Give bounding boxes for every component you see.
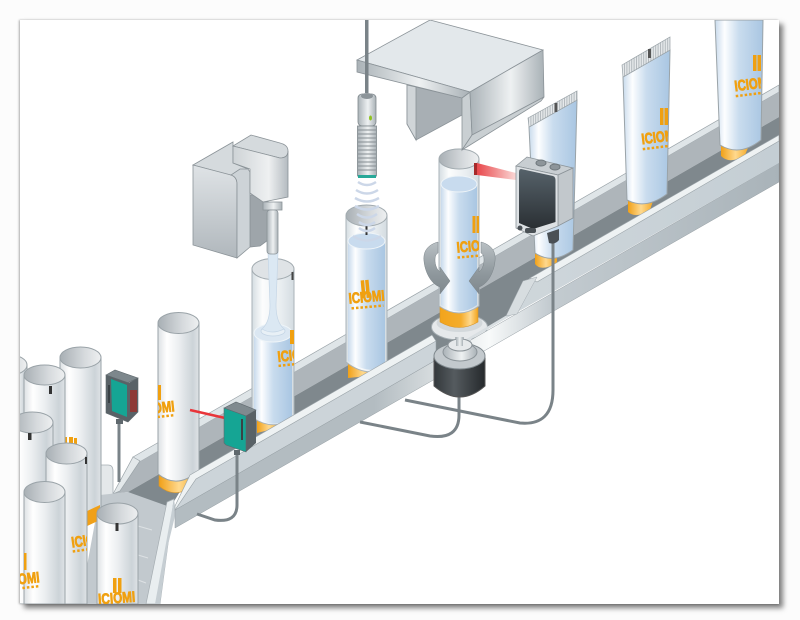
- green photoelectric sensor, front: [224, 402, 256, 455]
- large sensor with red beam: [474, 157, 573, 244]
- encoder: [434, 337, 485, 397]
- logo: tube two: ICIOMI: [277, 345, 314, 366]
- tube: front right: ICIOMI: [98, 589, 136, 608]
- logo: tube six: ICIOMI: [641, 127, 678, 148]
- tube: middle front: [46, 442, 88, 604]
- tube: being filled with stream: [252, 252, 294, 433]
- fluid stream: [262, 252, 284, 332]
- logo: tube seven: ICIOMI: [734, 74, 771, 95]
- green photoelectric sensor, back: [106, 370, 138, 424]
- logo: tube four: ICIOMI: [456, 236, 493, 257]
- hopper chute: [357, 20, 544, 150]
- red beam: [477, 163, 516, 180]
- conveyor back wall and floor: [113, 85, 779, 508]
- tube: front right: [97, 503, 138, 608]
- tube: sealed right: [714, 20, 764, 160]
- tube: back tall: [60, 347, 101, 527]
- logo: tube two: [277, 330, 294, 368]
- tube: far left: [20, 356, 28, 414]
- tube: rotating with fill level: [438, 148, 480, 328]
- arrow: left: [424, 242, 450, 294]
- turntable: [432, 314, 488, 340]
- feed plate and floor: [80, 465, 176, 604]
- logo: tube one: [158, 385, 174, 418]
- logo: tube seven: [734, 55, 761, 98]
- logo: tube three: [347, 279, 385, 309]
- tube: back second: [24, 364, 66, 445]
- sensing waves: [353, 182, 381, 240]
- tube: sealed near large sensor: [528, 91, 577, 268]
- rotation arrows: [424, 242, 495, 294]
- logo: tube one: ICIOMI: [138, 398, 175, 419]
- tube: sealed middle: [622, 36, 670, 216]
- conveyor front rail: [175, 135, 779, 528]
- cables: [119, 240, 553, 520]
- tube: middle front: ICIOMI: [70, 530, 108, 551]
- logo: tube six: [641, 108, 668, 150]
- proximity sensor with waves: [353, 20, 381, 240]
- tube: front left: ICIOMI: [3, 569, 40, 590]
- tube: front left: [20, 481, 66, 604]
- filling machine: [193, 135, 288, 258]
- logo: tube four: [456, 216, 479, 259]
- tube: middle left: [20, 412, 54, 604]
- logo: tube three: ICIOMI: [348, 287, 385, 308]
- red laser beam for green sensor: [190, 410, 225, 418]
- tube: inspected by proximity sensor: [346, 205, 387, 378]
- arrow: right: [469, 242, 495, 294]
- tube: empty tube on conveyor: [158, 312, 200, 493]
